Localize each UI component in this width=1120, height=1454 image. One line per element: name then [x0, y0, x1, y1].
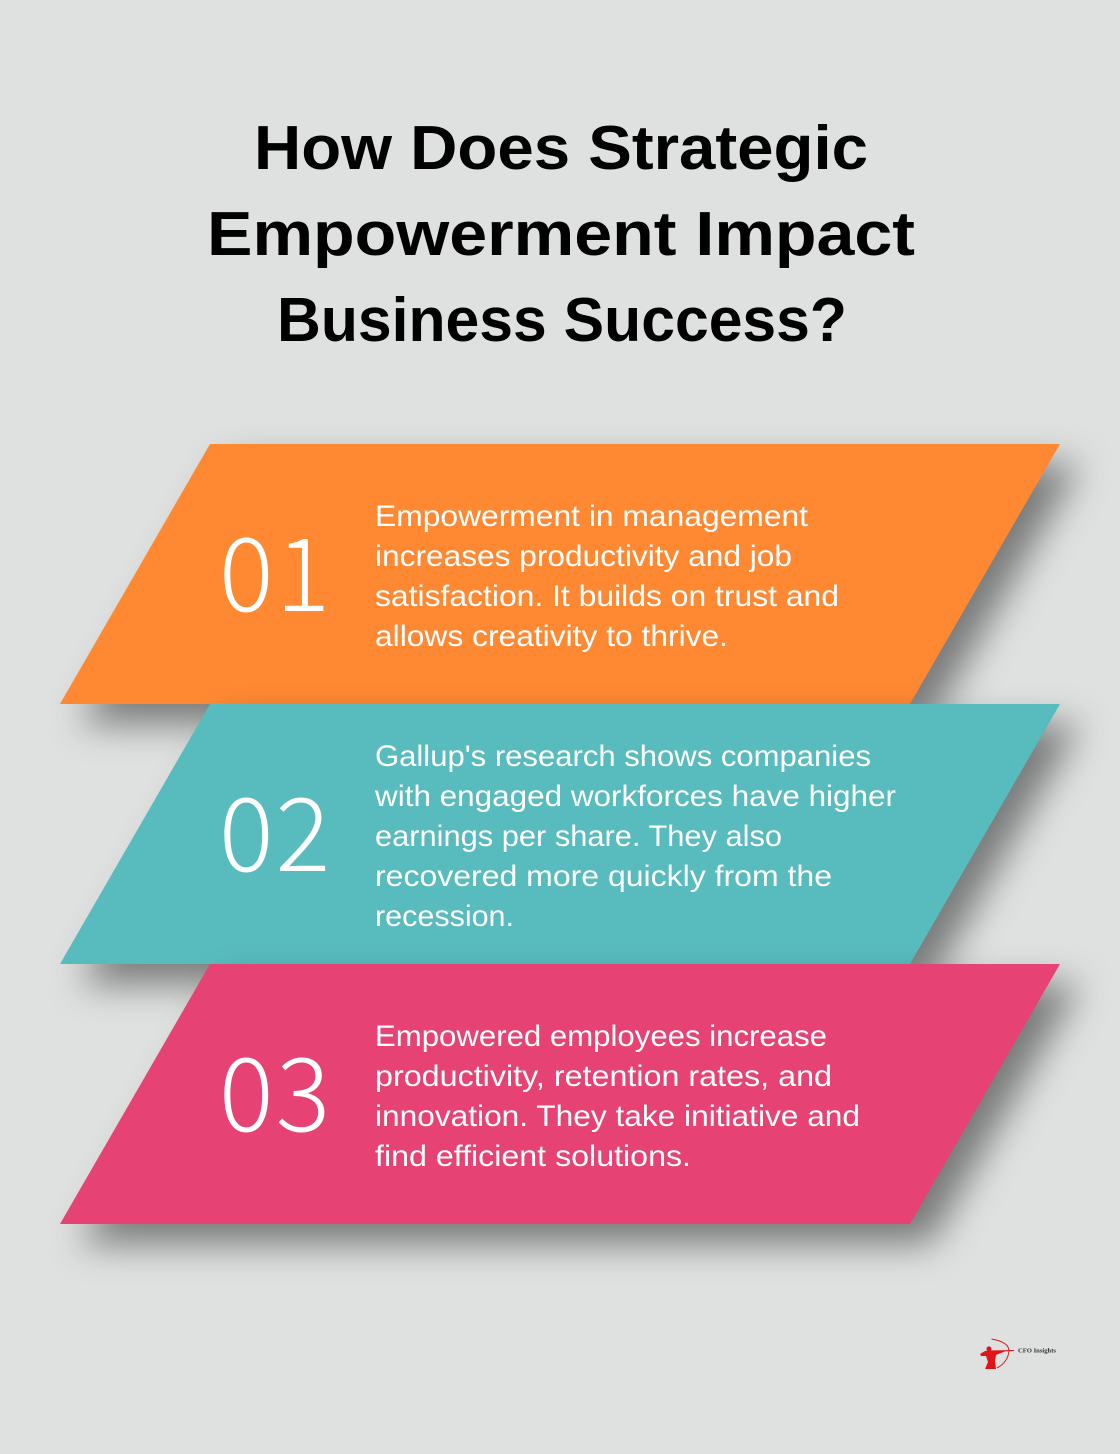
- title: Business Success?: [277, 286, 847, 355]
- title: [207, 114, 915, 355]
- text: step 01: allows creativity to thrive.: [375, 620, 728, 653]
- text: step 03: Empowered employees increase: [375, 1020, 827, 1053]
- text: step 02: earnings per share. They also: [375, 820, 782, 853]
- icon: red archer: [980, 1339, 1014, 1369]
- number 01: 01: [219, 494, 332, 641]
- panel: step 01: [60, 444, 1080, 724]
- pink parallelogram: [60, 964, 1060, 1224]
- number 03: 03: [219, 1014, 332, 1161]
- text: step 03: [375, 1020, 860, 1173]
- teal parallelogram: [60, 704, 1060, 964]
- text: step 03: innovation. They take initiative and: [375, 1100, 860, 1133]
- text: step 02: recovered more quickly from the: [375, 860, 832, 893]
- number 02: 02: [219, 754, 332, 901]
- logo: CFO Insights: [980, 1339, 1057, 1369]
- text: step 01: [375, 500, 839, 653]
- text: step 02: recession.: [375, 900, 514, 933]
- text: step 01: Empowerment in management: [375, 500, 809, 533]
- title: Empowerment Impact: [207, 200, 915, 269]
- logo text: CFO Insights: [1018, 1348, 1057, 1354]
- text: step 01: satisfaction. It builds on trust and: [375, 580, 839, 613]
- text: step 02: with engaged workforces have higher: [374, 780, 896, 813]
- panel: step 02: [60, 704, 1080, 984]
- panel: step 03: [60, 964, 1080, 1244]
- text: step 02: Gallup's research shows companies: [375, 740, 871, 773]
- title: How Does Strategic: [254, 114, 868, 183]
- text: step 03: find efficient solutions.: [375, 1140, 691, 1173]
- text: step 01: increases productivity and job: [375, 540, 792, 573]
- text: step 02: [374, 740, 896, 933]
- orange parallelogram: [60, 444, 1060, 704]
- text: step 03: productivity, retention rates, and: [375, 1060, 832, 1093]
